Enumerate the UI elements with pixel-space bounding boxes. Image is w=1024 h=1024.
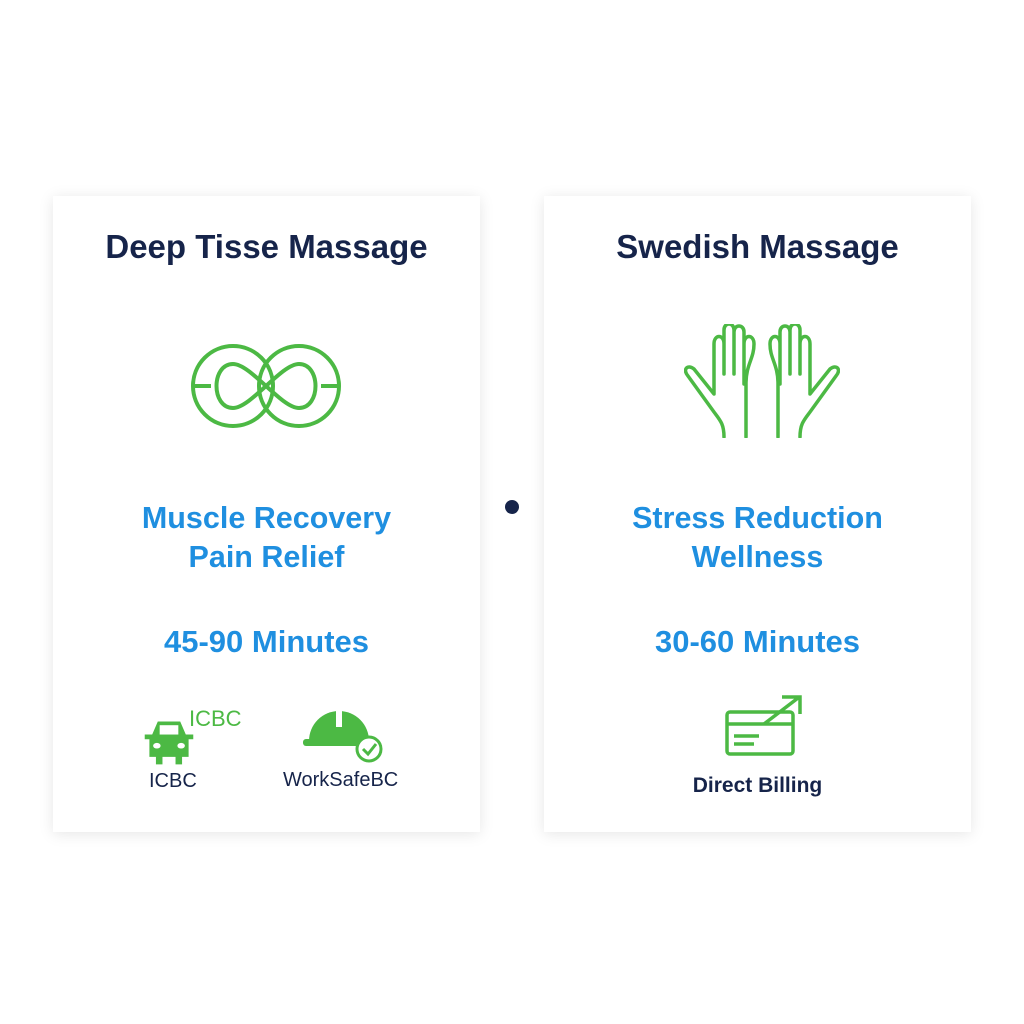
dot (505, 500, 519, 514)
heading: deep tissue: Deep Tisse Massage (105, 228, 428, 265)
label: ICBC: ICBC (149, 770, 197, 792)
label: WorkSafeBC: WorkSafeBC (283, 769, 398, 791)
text: benefits: Pain Relief (189, 540, 344, 574)
text: benefits: Wellness (692, 540, 823, 574)
icon: infinity (191, 344, 341, 428)
text: benefits: Muscle Recovery (142, 501, 391, 535)
text: benefits (632, 501, 883, 574)
text: duration: 45-90 Minutes (164, 624, 369, 659)
heading: swedish: Swedish Massage (616, 228, 899, 265)
icon: ICBC car: ICBC (189, 706, 242, 731)
icon: ICBC car (144, 706, 242, 792)
icon: direct billing card (725, 695, 802, 756)
panel: deep tissue (53, 196, 480, 832)
icon: WorkSafeBC helmet (283, 711, 398, 791)
label: direct billing: Direct Billing (693, 774, 822, 797)
text: benefits (142, 501, 391, 574)
icon: hands (684, 324, 840, 438)
panel: swedish (544, 196, 971, 832)
text: duration: 30-60 Minutes (655, 624, 860, 659)
text: benefits: Stress Reduction (632, 501, 883, 535)
